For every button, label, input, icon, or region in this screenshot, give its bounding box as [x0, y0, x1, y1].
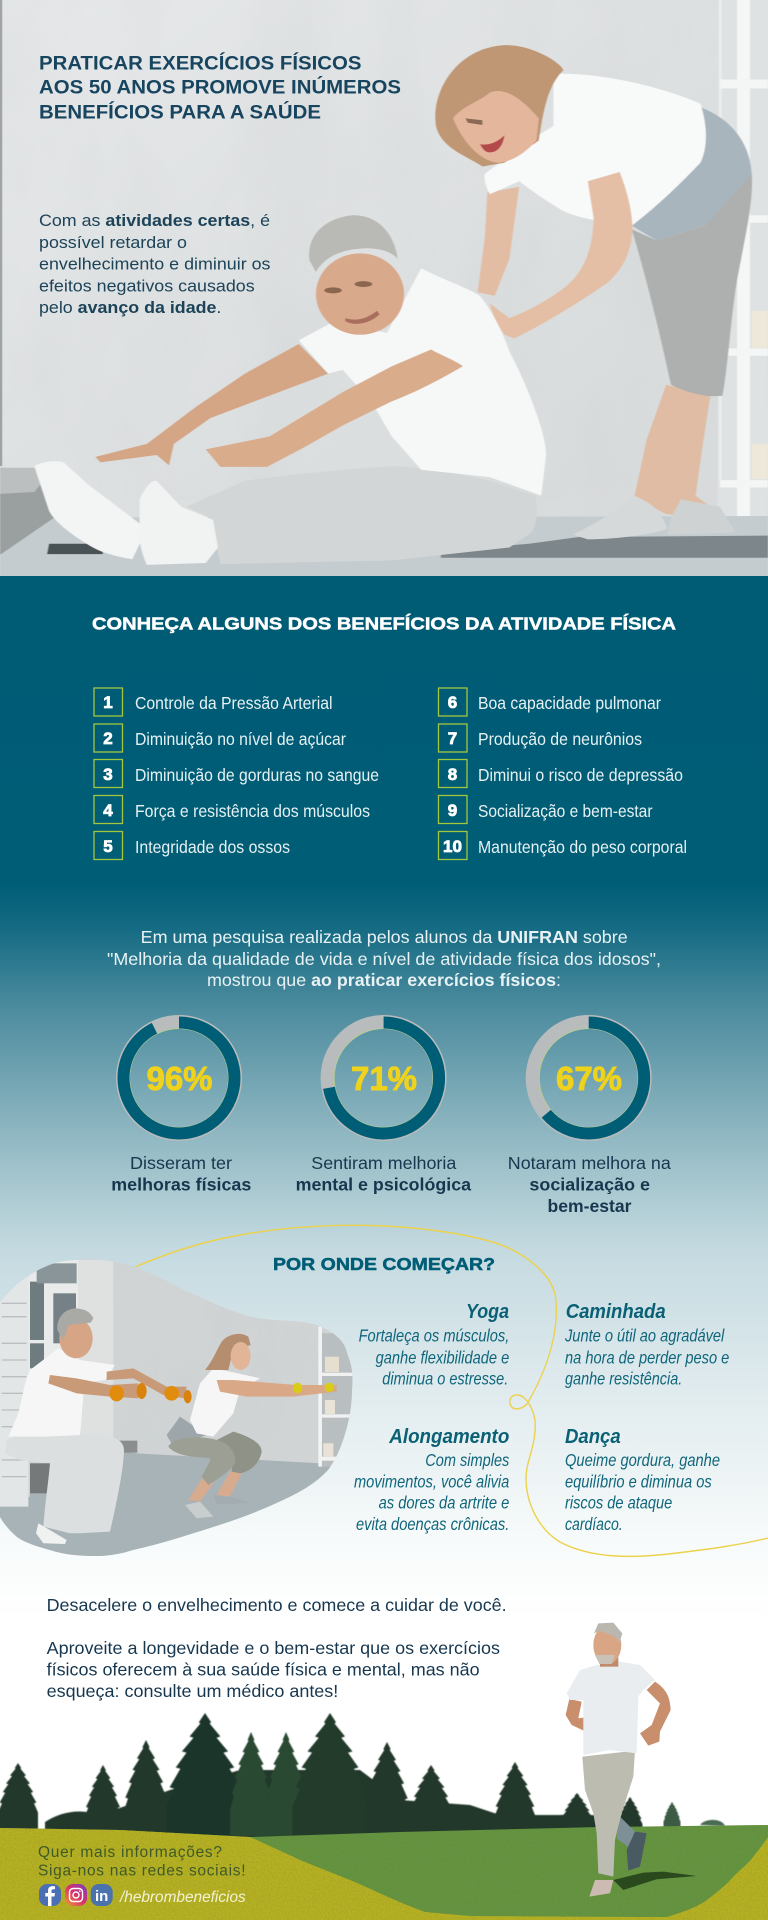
treeline [0, 1713, 725, 1840]
numbers: 7 [448, 729, 457, 748]
intro text block [39, 211, 270, 317]
benefit labels: Força e resistência dos músculos [135, 801, 370, 821]
intro text block: pelo avanço da idade . [39, 298, 221, 317]
activity: Caminhada [564, 1301, 730, 1388]
activity: Dança: Queime gordura, ganhe [565, 1450, 720, 1470]
donut caption: 67% [508, 1153, 671, 1216]
donut caption: 96% [111, 1153, 252, 1194]
title: AOS 50 ANOS PROMOVE INÚMEROS [39, 77, 401, 99]
title [39, 52, 401, 124]
activity: Dança [565, 1426, 720, 1534]
numbers: 1 [103, 693, 113, 712]
numbers: 4 [103, 801, 113, 820]
donut caption: 71%: Sentiram melhoria [311, 1153, 457, 1173]
intro text block: possível retardar o [39, 233, 187, 252]
number boxes, column 2 [438, 688, 467, 860]
intro text block: efeitos negativos causados [39, 276, 255, 296]
activity: Alongamento [354, 1426, 510, 1534]
intro text block: envelhecimento e diminuir os [39, 255, 270, 274]
intro text block: Com as atividades certas , é [39, 211, 270, 230]
numbers: 6 [448, 693, 457, 712]
donut caption: 71%: mental e psicológica [296, 1174, 471, 1194]
social call to action [38, 1844, 246, 1880]
runner photo [566, 1623, 697, 1897]
man [96, 344, 328, 465]
activity: Dança: Dança [565, 1426, 621, 1448]
numbers: 9 [448, 801, 457, 820]
donut chart: 71% [328, 1022, 440, 1134]
closing text block: Desacelere o envelhecimento e comece a cuidar de você. [47, 1595, 507, 1615]
benefit labels: Socialização e bem-estar [478, 801, 653, 821]
activity: Yoga: ganhe flexibilidade e [376, 1347, 510, 1367]
benefit labels: Diminuição de gorduras no sangue [135, 765, 379, 785]
donut chart: 96%: 96% [146, 1060, 213, 1097]
donut chart: 67%: 67% [556, 1060, 622, 1097]
benefit labels: Boa capacidade pulmonar [478, 693, 661, 713]
exercise photo: couple squatting with dumbbells [0, 1250, 360, 1567]
number boxes, column 1 [94, 688, 122, 860]
activity: Alongamento: Com simples [425, 1450, 509, 1470]
activity: Dança: cardíaco. [565, 1514, 623, 1534]
numbers: 3 [103, 765, 113, 784]
benefits list [94, 688, 687, 860]
title: PRATICAR EXERCÍCIOS FÍSICOS [39, 52, 362, 74]
donut caption: 96%: melhoras físicas [111, 1174, 252, 1194]
donut caption: 96%: Disseram ter [130, 1153, 232, 1173]
page background gradient [0, 576, 768, 1920]
donut chart: 96% [123, 1022, 235, 1134]
donut caption: 67%: bem-estar [548, 1196, 632, 1216]
donut caption: 67%: socialização e [529, 1174, 650, 1194]
activity: Dança: equilíbrio e diminua os [565, 1471, 712, 1491]
social handle: /hebrombeneficios [119, 1889, 246, 1906]
activity: Yoga: diminua o estresse. [382, 1368, 508, 1388]
activity: Yoga: Yoga [466, 1301, 509, 1323]
benefit labels: Integridade dos ossos [135, 837, 290, 857]
donut caption: 67%: Notaram melhora na [508, 1153, 671, 1173]
activity: Caminhada: Junte o útil ao agradável [564, 1326, 725, 1346]
activity: Alongamento: evita doenças crônicas. [356, 1514, 509, 1534]
activity: Yoga [359, 1301, 510, 1388]
benefit labels [135, 693, 687, 857]
numbers: 8 [448, 765, 457, 784]
closing text block [47, 1595, 507, 1701]
icon: instagram [65, 1884, 87, 1906]
yellow looping line [135, 1225, 768, 1556]
closing text block: Aproveite a longevidade e o bem-estar que os exercícios [47, 1638, 500, 1658]
activity: Yoga: Fortaleça os músculos, [359, 1326, 509, 1346]
heading: where to start: POR ONDE COMEÇAR? [273, 1254, 495, 1274]
hero photo: seated man stretching and woman helping [0, 0, 768, 577]
research intro text: Em uma pesquisa realizada pelos alunos da UNIFRAN sobre [141, 927, 628, 947]
numbers: 5 [103, 837, 113, 856]
activity: Alongamento: movimentos, você alivia [354, 1471, 510, 1491]
icon: linkedin [91, 1884, 113, 1906]
benefit labels: Produção de neurônios [478, 729, 642, 749]
heading: benefits: CONHEÇA ALGUNS DOS BENEFÍCIOS DA ATIVIDADE FÍSICA [92, 612, 676, 634]
donut caption: 71% [296, 1153, 471, 1194]
title: BENEFÍCIOS PARA A SAÚDE [39, 102, 321, 124]
benefit labels: Manutenção do peso corporal [478, 837, 687, 857]
social call to action: Siga-nos nas redes sociais! [38, 1863, 246, 1880]
activity: Caminhada: Caminhada [566, 1301, 666, 1323]
closing text block: esqueça: consulte um médico antes! [47, 1681, 338, 1701]
numbers: 2 [103, 729, 113, 748]
numbers: 10 [443, 837, 462, 856]
social call to action: Quer mais informações? [38, 1844, 222, 1861]
benefit labels: Diminuição no nível de açúcar [135, 729, 346, 749]
research intro text: mostrou que ao praticar exercícios físicos : [207, 970, 561, 990]
icon: facebook [39, 1884, 61, 1906]
activity: Alongamento: as dores da artrite e [379, 1492, 510, 1512]
grass field [0, 1820, 768, 1920]
research intro text [107, 927, 661, 990]
research intro text: "Melhoria da qualidade de vida e nível de atividade física dos idosos", [107, 949, 661, 969]
activity: Dança: riscos de ataque [565, 1492, 673, 1512]
benefit labels: Diminui o risco de depressão [478, 765, 683, 785]
closing text block: físicos oferecem à sua saúde física e mental, mas não [47, 1660, 480, 1680]
numbers [103, 693, 462, 856]
icon: linkedin: in [95, 1888, 108, 1905]
donut chart: 67% [533, 1022, 645, 1134]
benefit labels: Controle da Pressão Arterial [135, 693, 332, 713]
woman legs and socks [634, 384, 710, 514]
activity: Caminhada: ganhe resistência. [565, 1368, 682, 1388]
donut chart: 71%: 71% [351, 1060, 417, 1097]
activity: Alongamento: Alongamento [388, 1426, 509, 1448]
activity: Caminhada: na hora de perder peso e [565, 1347, 730, 1367]
